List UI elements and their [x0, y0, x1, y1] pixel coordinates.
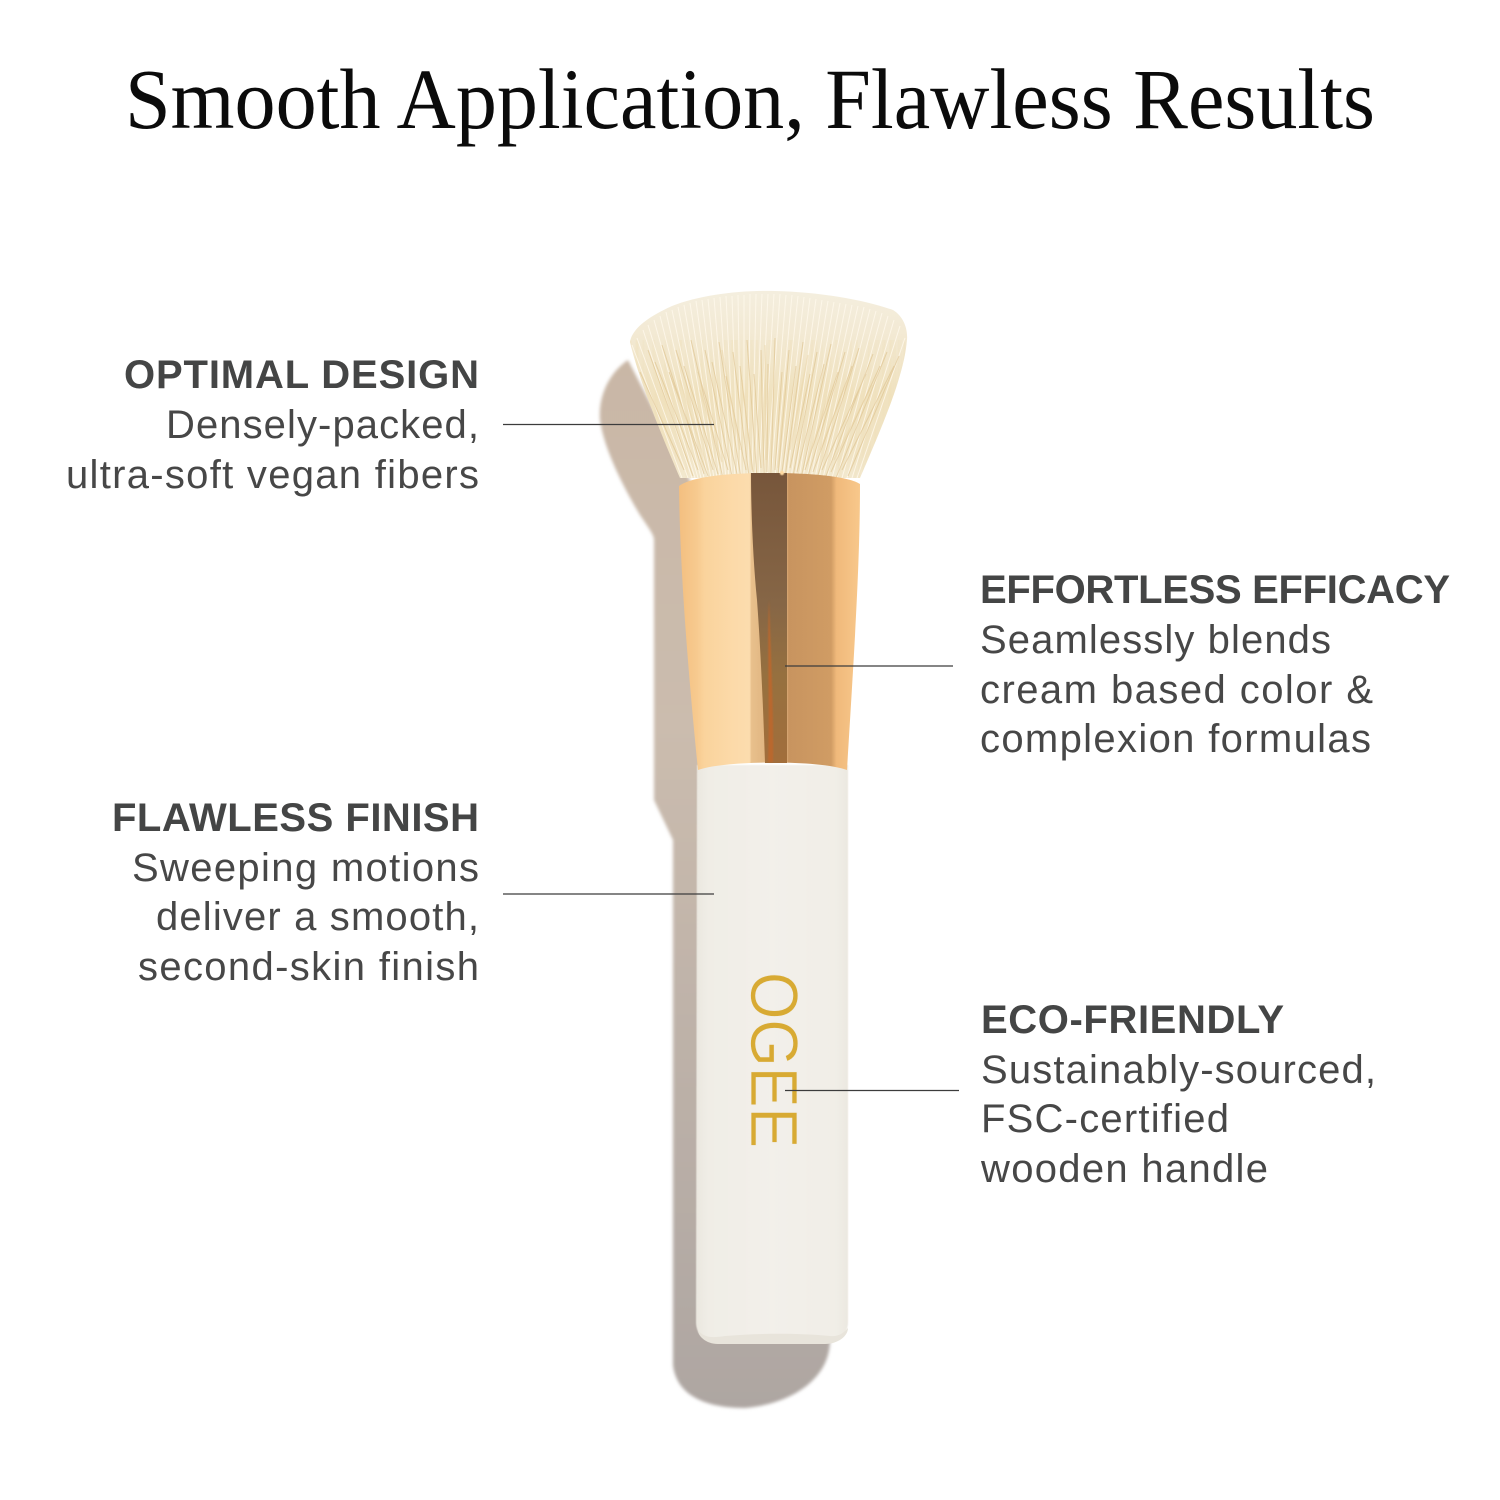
callout: flawless finish: FLAWLESS FINISH	[112, 796, 479, 840]
handle logo: OGEE	[736, 972, 811, 1148]
callout: effortless efficacy: EFFORTLESS EFFICACY	[980, 568, 1450, 612]
callout: flawless finish: Sweeping motions	[132, 846, 479, 890]
metal ferrule	[679, 471, 860, 770]
brush cast shadow	[600, 360, 830, 1408]
callout: eco-friendly: ECO-FRIENDLY	[981, 998, 1284, 1042]
title: Smooth Application, Flawless Results	[125, 51, 1375, 147]
callout: eco-friendly: Sustainably-sourced,	[981, 1048, 1376, 1092]
callout: effortless efficacy: Seamlessly blends	[980, 618, 1331, 662]
callout: optimal design	[66, 353, 714, 497]
callout: effortless efficacy	[785, 568, 1450, 761]
callout: optimal design: OPTIMAL DESIGN	[124, 353, 479, 397]
callout: optimal design: Densely-packed,	[166, 403, 479, 447]
callout: eco-friendly: wooden handle	[980, 1147, 1268, 1191]
callout: eco-friendly	[785, 998, 1376, 1191]
callout: effortless efficacy: cream based color &	[980, 668, 1373, 712]
callout: effortless efficacy: complexion formulas	[980, 717, 1371, 761]
brush handle	[696, 765, 848, 1344]
brush fibers	[630, 291, 908, 478]
callout: optimal design: ultra-soft vegan fibers	[66, 453, 479, 497]
brush product illustration	[600, 285, 915, 1408]
callout: flawless finish	[112, 796, 714, 989]
callout: flawless finish: second-skin finish	[138, 945, 479, 989]
ferrule dark reflection	[751, 473, 787, 763]
callout: eco-friendly: FSC-certified	[981, 1097, 1229, 1141]
callout: flawless finish: deliver a smooth,	[156, 895, 479, 939]
